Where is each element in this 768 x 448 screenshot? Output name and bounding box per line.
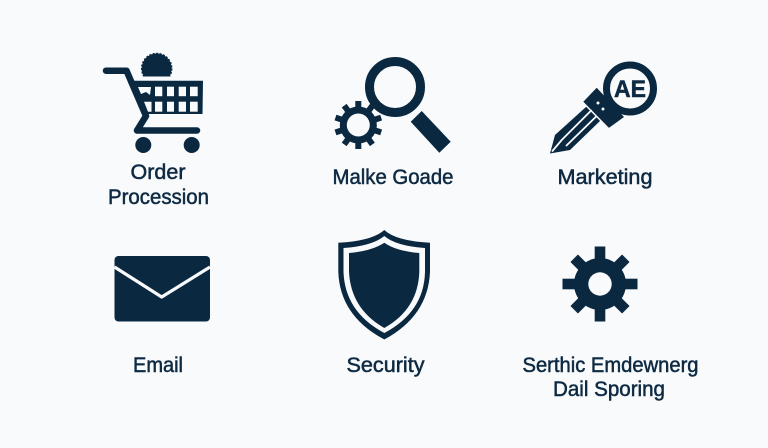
label: email: Email — [133, 354, 183, 377]
label: serthic emdewnerg dail sporing: Serthic Emdewnerg — [522, 354, 698, 377]
label: security: Security — [346, 354, 425, 377]
icon: key pen with AE badge — [550, 65, 654, 154]
label: order procession: Order — [130, 161, 186, 184]
label: serthic emdewnerg dail sporing: Dail Sporing — [553, 378, 665, 401]
label: serthic emdewnerg dail sporing — [522, 354, 698, 401]
icon: security shield — [338, 230, 430, 340]
icon: magnifier and gear — [335, 62, 451, 153]
label: order procession — [108, 161, 209, 209]
label: order procession: Procession — [108, 186, 209, 209]
label: malke goade: Malke Goade — [332, 166, 454, 189]
icon: key pen with AE badge: AE — [614, 76, 646, 103]
icon: shopping cart — [106, 54, 203, 153]
icon: email envelope — [114, 256, 210, 322]
label: marketing: Marketing — [558, 166, 652, 189]
icon: settings gear — [562, 246, 638, 322]
